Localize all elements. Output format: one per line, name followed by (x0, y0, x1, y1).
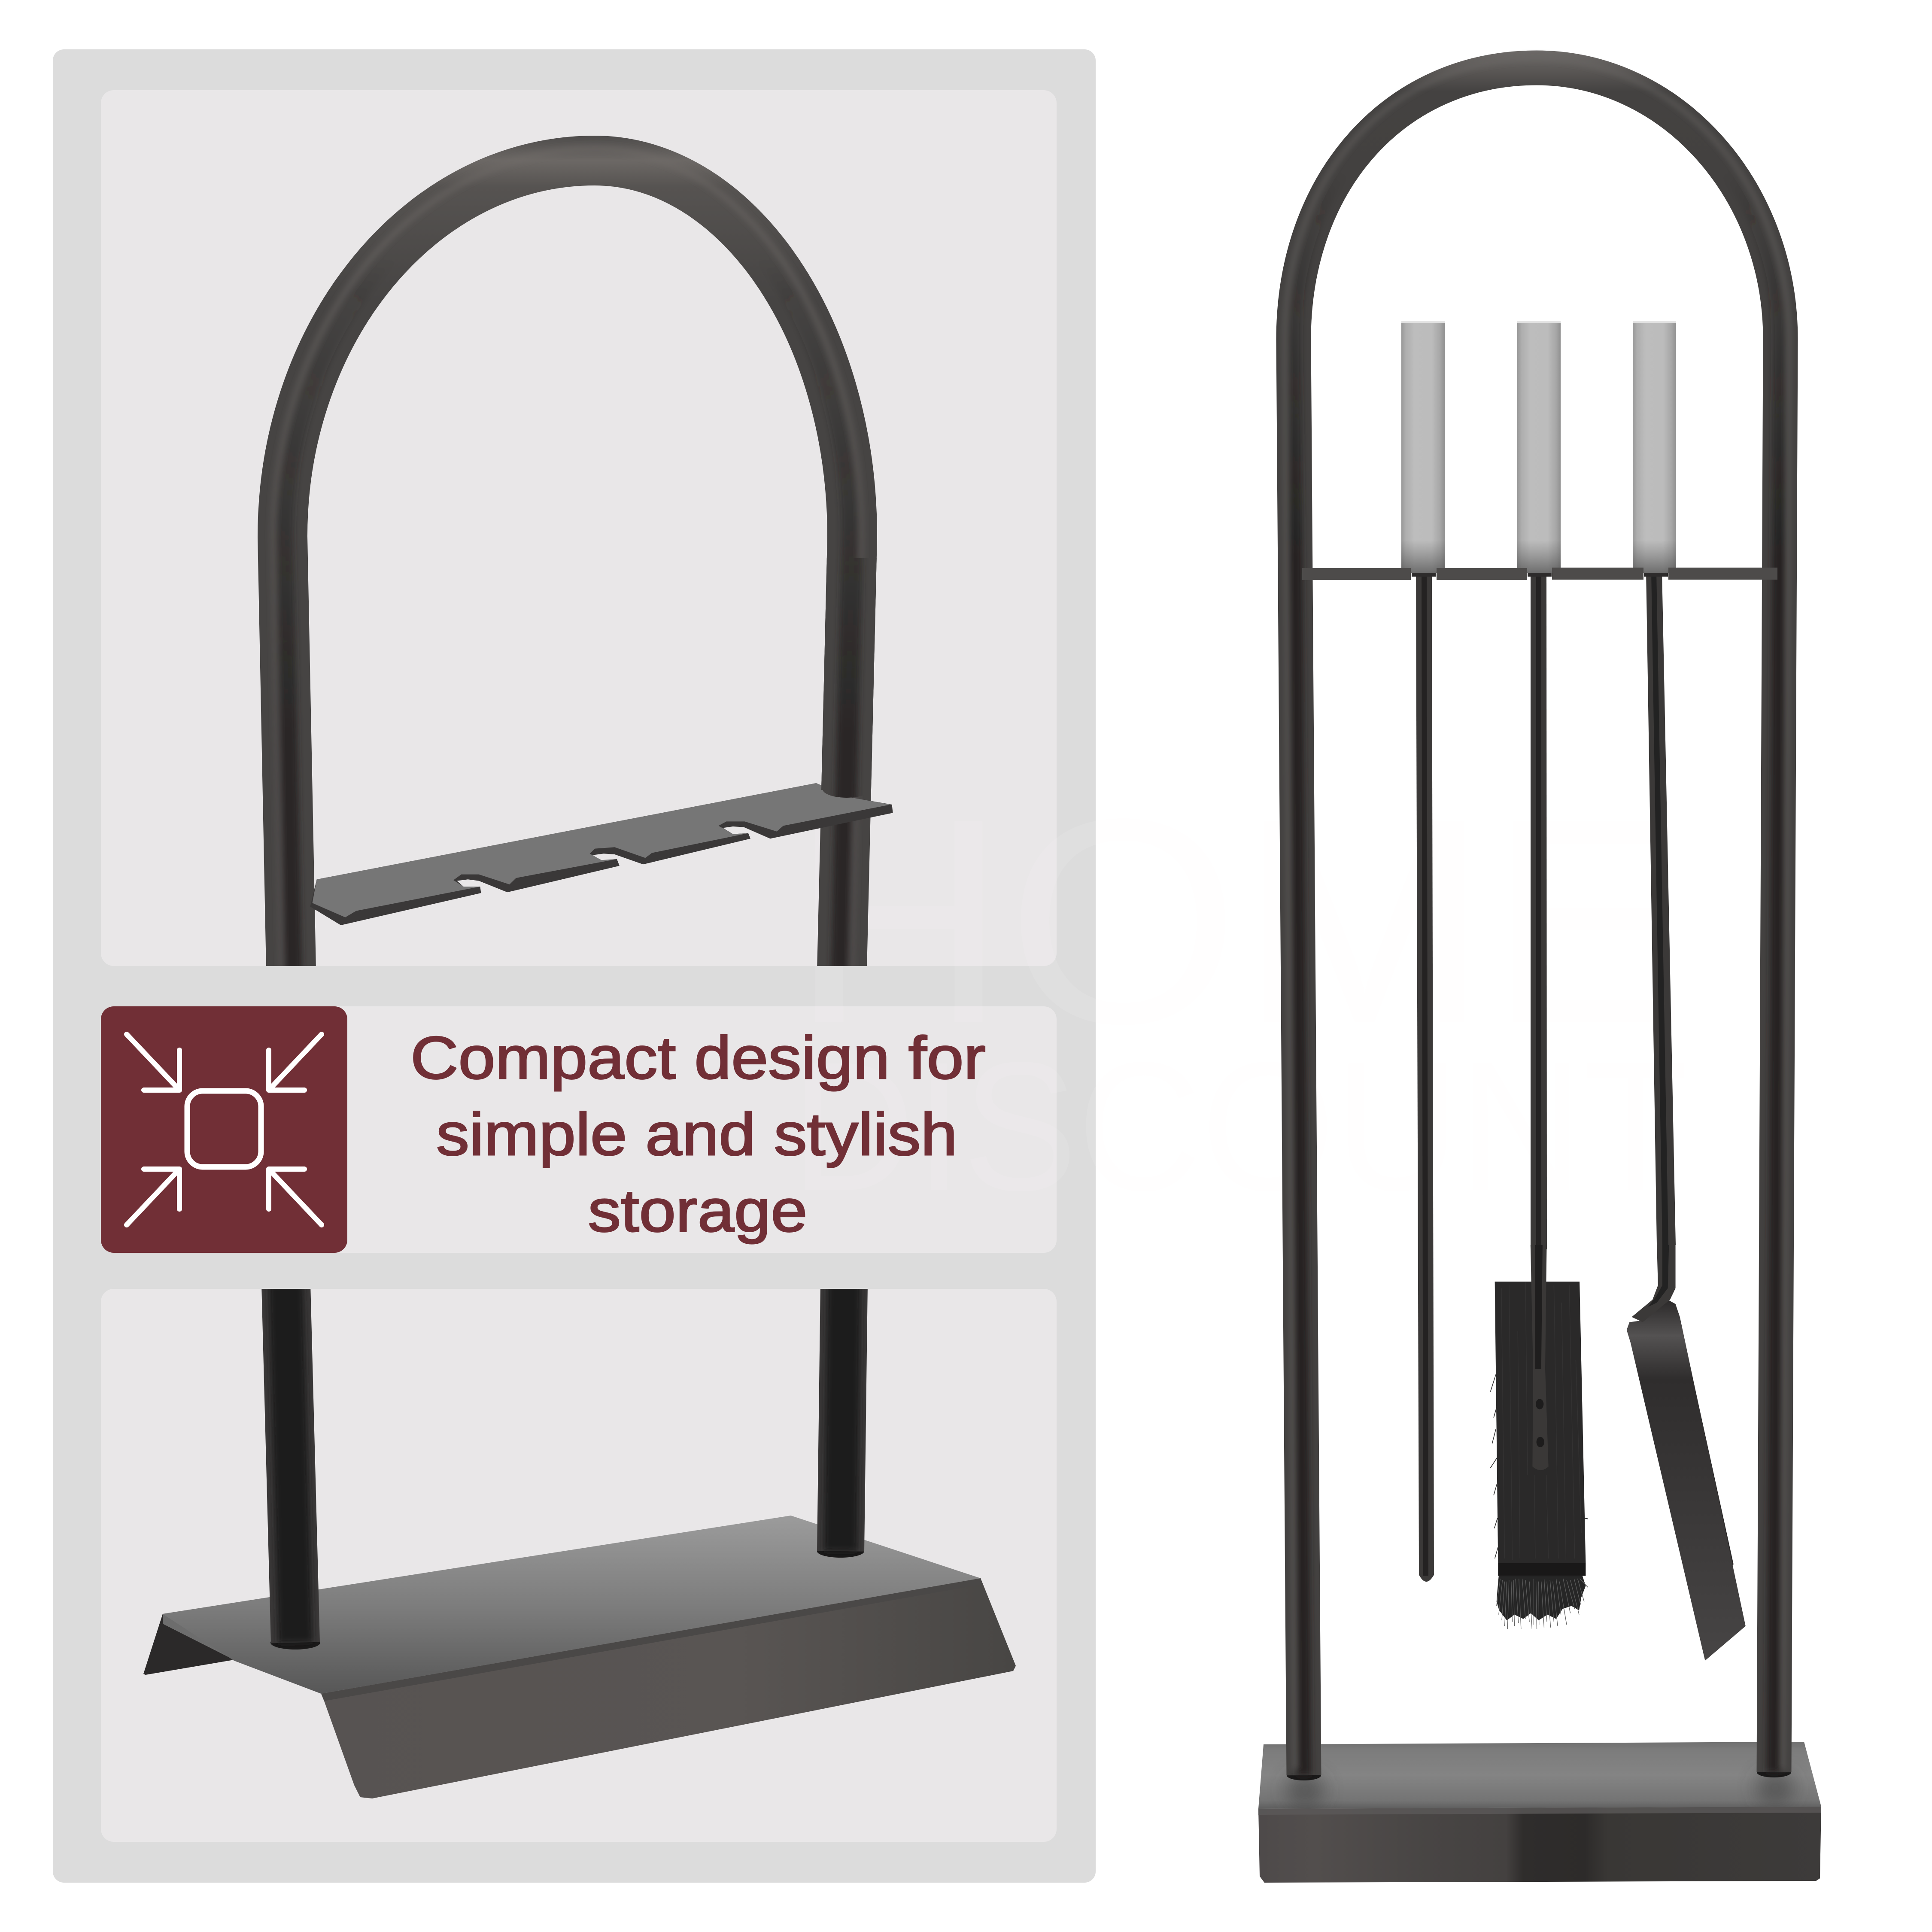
fireplace tool: brush (1490, 571, 1588, 1629)
right tube (817, 1284, 864, 1558)
full product: arch frame (1285, 58, 1789, 1826)
top close-up: frame arch and slotted shelf (273, 149, 893, 984)
panel: grey detail background (53, 49, 1096, 1883)
board (1495, 1282, 1586, 1563)
base back flap (163, 1614, 228, 1657)
brush handle (1531, 1245, 1549, 1470)
faint watermark: DISCOUNT (791, 1024, 1688, 1229)
caption text: storage (588, 1177, 807, 1244)
bottom close-up: base with tubes (143, 1284, 1016, 1798)
fireplace tool: poker (1416, 571, 1434, 1582)
base top face (163, 1516, 981, 1694)
caption text: Compact design for (410, 1024, 986, 1091)
icon: compact arrows pointing to square (101, 1006, 347, 1253)
caption text (410, 1024, 986, 1244)
slotted shelf (310, 783, 893, 925)
panel cards: three light rounded cards (101, 90, 1057, 1842)
fireplace tool: shovel (1627, 571, 1746, 1661)
handles: three silver tubes (1401, 321, 1676, 573)
base front face (321, 1578, 1016, 1798)
feature caption band (101, 1006, 986, 1253)
faint watermark (791, 758, 1688, 1229)
bristles (1497, 1576, 1586, 1620)
caption text: simple and stylish (436, 1100, 957, 1168)
faint watermark: HOME (791, 758, 1688, 1084)
base of full product (1258, 1742, 1821, 1883)
left tube (270, 1284, 320, 1649)
slotted shelf on full product (1302, 568, 1777, 580)
